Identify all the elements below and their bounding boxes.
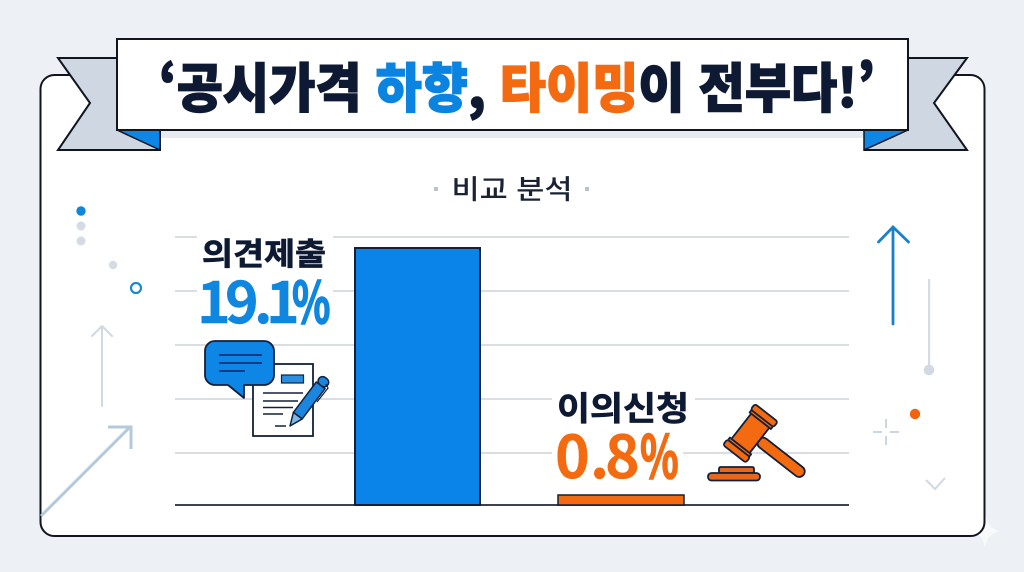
label: 이의신청: 이의신청 — [557, 382, 689, 430]
decoration: dashed cross — [873, 419, 899, 445]
chart grid lines — [175, 237, 849, 453]
icon: document, speech bubble and pen — [205, 341, 331, 436]
ribbon: left blue fold — [117, 130, 160, 150]
decoration: right grey pin — [924, 279, 934, 375]
value: 19.1%: % — [292, 258, 330, 340]
icon: diagonal arrow — [41, 427, 131, 516]
ribbon: left tail — [58, 58, 160, 150]
ribbon: right blue fold — [864, 130, 908, 150]
text mask: right label upper — [552, 386, 695, 426]
decoration: orange dot — [910, 409, 920, 419]
label: 의견제출: 의견제출 — [202, 229, 326, 274]
bar: 의견제출 19.1% — [355, 248, 480, 505]
icon: gavel — [708, 404, 820, 495]
subtitle — [434, 168, 589, 207]
value: 19.1%: 19.1 — [197, 258, 300, 340]
decoration: sparkle — [970, 512, 1000, 548]
decoration: chevron — [926, 478, 945, 489]
chart: comparison bars — [175, 237, 849, 506]
ribbon: title banner — [117, 39, 908, 130]
value: 0.8%: 0.8 — [555, 410, 640, 495]
text mask: left label — [197, 232, 333, 328]
chart baseline — [175, 504, 849, 506]
icon: light up arrow — [92, 326, 112, 406]
decoration: left dots — [76, 206, 141, 293]
text mask: right label lower — [552, 426, 683, 482]
subtitle: 비교 분석 — [452, 168, 572, 207]
panel: main card — [40, 75, 984, 536]
icon: blue up arrow — [878, 227, 908, 324]
ribbon: right tail — [864, 58, 967, 150]
title: ‘공시가격 하향, 타이밍이 전부다!’ — [159, 47, 875, 123]
bar: 이의신청 0.8% — [558, 495, 684, 505]
value: 0.8%: % — [640, 409, 679, 496]
value: 0.8% — [555, 409, 679, 496]
